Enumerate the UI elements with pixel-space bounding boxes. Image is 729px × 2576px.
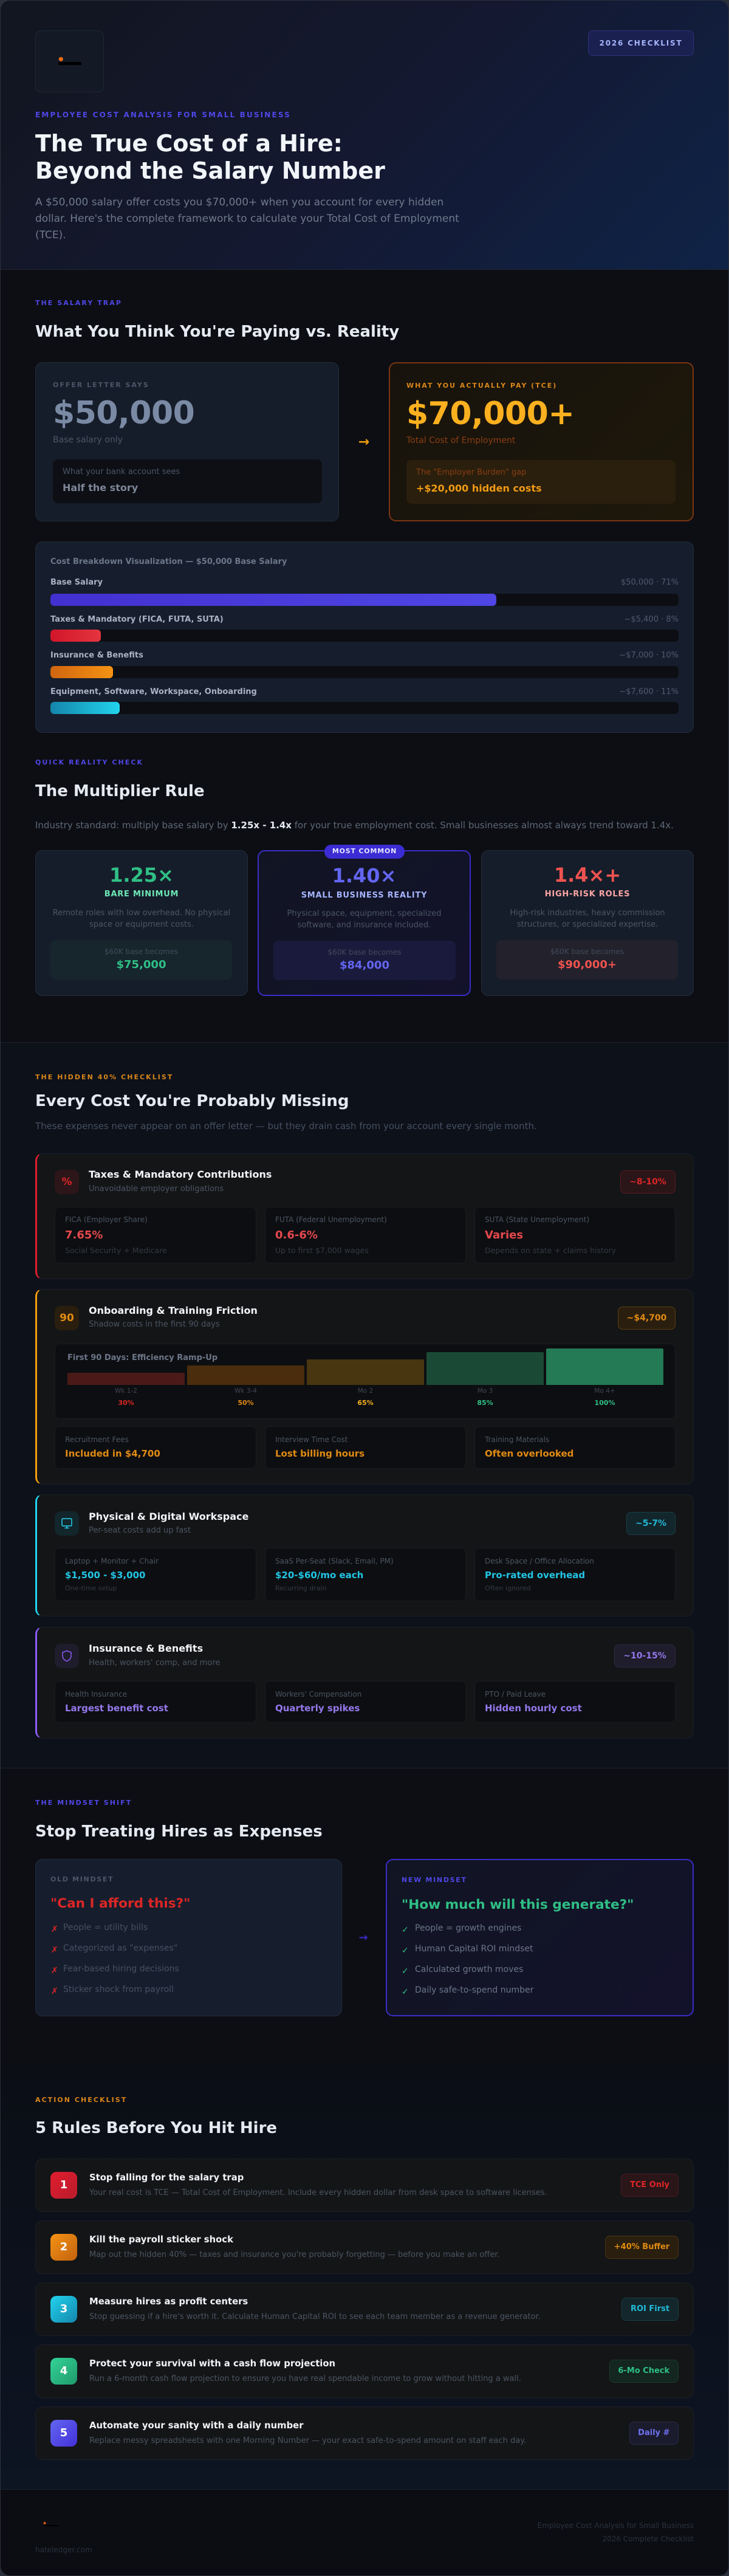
- label: Health Insurance: [65, 1690, 127, 1698]
- icon: shield: [55, 1644, 79, 1668]
- card title: Insurance & Benefits: [89, 1643, 203, 1654]
- value: Pro-rated overhead: [485, 1570, 585, 1581]
- item text: People = growth engines: [415, 1923, 521, 1933]
- description: [510, 908, 665, 929]
- value: $1,500 - $3,000: [65, 1570, 145, 1581]
- result value: $84,000: [340, 959, 389, 972]
- note: Up to first $7,000 wages: [275, 1246, 369, 1255]
- footer note: [538, 2521, 694, 2543]
- shield glyph: [62, 1650, 72, 1661]
- item: ✓: [402, 1925, 409, 1935]
- arrow: →: [358, 1931, 368, 1944]
- bar: month 4+: [546, 1348, 663, 1385]
- result label: $60K base becomes: [550, 947, 624, 956]
- label: NEW MINDSET: [402, 1876, 467, 1884]
- footer domain: hateledger.com: [35, 2546, 92, 2554]
- result value: $75,000: [117, 958, 166, 971]
- value: Lost billing hours: [275, 1448, 364, 1459]
- row label: Taxes & Mandatory (FICA, FUTA, SUTA): [50, 615, 224, 623]
- rule 4: [35, 2344, 694, 2398]
- section title: Stop Treating Hires as Expenses: [35, 1822, 323, 1841]
- item text: Fear-based hiring decisions: [63, 1964, 179, 1974]
- value: Included in $4,700: [65, 1448, 160, 1459]
- section: action checklist: [0, 2065, 729, 2490]
- box: SaaS: [265, 1548, 466, 1601]
- section tag: THE HIDDEN 40% CHECKLIST: [35, 1073, 173, 1081]
- box: health: [55, 1681, 256, 1723]
- card label: SMALL BUSINESS REALITY: [301, 891, 427, 900]
- value: 100%: [594, 1399, 615, 1407]
- box: recruitment: [55, 1426, 256, 1469]
- label: SUTA (State Unemployment): [485, 1215, 589, 1224]
- intro text: Industry standard: multiply base salary by 1.25x - 1.4x for your true employment cost. Small businesses almost always trend toward 1.4x.: [35, 820, 674, 831]
- section title: What You Think You're Paying vs. Reality: [35, 323, 399, 341]
- cost pill: ~10-15%: [623, 1651, 666, 1661]
- section: the salary trap: [0, 270, 729, 1043]
- item: ✓: [402, 1987, 409, 1997]
- bar: weeks 3-4: [187, 1365, 304, 1385]
- number: 4: [60, 2365, 67, 2377]
- rule 1: [35, 2159, 694, 2212]
- axis label: Mo 4+: [594, 1387, 615, 1395]
- card title: Taxes & Mandatory Contributions: [89, 1169, 272, 1180]
- number: [50, 2234, 77, 2261]
- axis label: Mo 2: [358, 1387, 373, 1395]
- tag pill: [621, 2298, 679, 2321]
- box: workers comp: [265, 1681, 466, 1723]
- multiplier: 1.25×: [109, 864, 174, 887]
- row value: ~$7,000 · 10%: [619, 650, 679, 660]
- number: [50, 2172, 77, 2199]
- badge: most common: [324, 845, 405, 859]
- card subtitle: Health, workers' comp, and more: [89, 1658, 220, 1668]
- row value: ~$5,400 · 8%: [625, 615, 679, 623]
- tag pill: [629, 2422, 679, 2445]
- item: ✓: [402, 1966, 409, 1976]
- value: Hidden hourly cost: [485, 1703, 582, 1714]
- label: OLD MINDSET: [50, 1875, 114, 1883]
- rule text: Stop guessing if a hire's worth it. Calculate Human Capital ROI to see each team member as a revenue generator.: [89, 2312, 541, 2321]
- cost pill: ~5-7%: [635, 1519, 666, 1528]
- cost pill: ~$4,700: [627, 1313, 666, 1323]
- item: ✗: [51, 1966, 58, 1976]
- value: Varies: [485, 1229, 523, 1242]
- box: SUTA: [474, 1207, 676, 1263]
- logo box: [35, 30, 104, 92]
- big number: $70,000+: [406, 396, 574, 432]
- result label: $60K base becomes: [327, 948, 402, 957]
- result box: [273, 941, 456, 980]
- rule title: Automate your sanity with a daily number: [89, 2420, 304, 2431]
- rule text: Your real cost is TCE — Total Cost of Employment. Include every hidden dollar from desk space to software licenses.: [89, 2188, 547, 2197]
- callout label: What your bank account sees: [63, 467, 180, 476]
- item text: Calculated growth moves: [415, 1965, 523, 1974]
- label: Workers' Compensation: [275, 1690, 361, 1698]
- bar: taxes: [50, 630, 679, 642]
- box: laptop: [55, 1548, 256, 1601]
- card: insurance: [35, 1627, 694, 1739]
- rule title: Measure hires as profit centers: [89, 2296, 248, 2307]
- note: Often ignored: [485, 1584, 531, 1592]
- description: software, and insurance included.: [298, 921, 431, 930]
- value: Often overlooked: [485, 1448, 573, 1459]
- card: 1.4x+: [481, 850, 694, 996]
- box: FICA: [55, 1207, 256, 1263]
- section subtitle: These expenses never appear on an offer letter — but they drain cash from your account every single month.: [35, 1121, 537, 1132]
- callout value: +$20,000 hidden costs: [416, 483, 542, 494]
- section tag: QUICK REALITY CHECK: [35, 758, 143, 766]
- cost pill: [618, 1307, 676, 1330]
- badge: 2026 checklist: 2026 CHECKLIST: [600, 39, 682, 47]
- card subtitle: Per-seat costs add up fast: [89, 1526, 191, 1535]
- value: Quarterly spikes: [275, 1703, 360, 1714]
- cost pill: [626, 1512, 676, 1535]
- bar: month 3: [426, 1352, 544, 1385]
- icon: percent: [55, 1170, 79, 1194]
- label: PTO / Paid Leave: [485, 1690, 546, 1698]
- value: 7.65%: [65, 1229, 103, 1242]
- tag pill: TCE Only: [630, 2180, 669, 2190]
- label: Desk Space / Office Allocation: [485, 1557, 594, 1565]
- row label: Base Salary: [50, 578, 103, 587]
- cost pill: [614, 1644, 676, 1668]
- panel: new mindset: [386, 1859, 694, 2016]
- tag pill: [605, 2236, 679, 2259]
- description: [287, 909, 442, 930]
- number: [50, 2420, 77, 2447]
- card subtitle: Shadow costs in the first 90 days: [89, 1320, 220, 1329]
- chart: efficiency ramp-up: [55, 1344, 676, 1419]
- value: 0.6-6%: [275, 1229, 318, 1242]
- note: Depends on state + claims history: [485, 1246, 616, 1255]
- value: 85%: [477, 1399, 493, 1407]
- quote: "Can I afford this?": [50, 1896, 190, 1911]
- chart title: First 90 Days: Efficiency Ramp-Up: [67, 1353, 217, 1362]
- item: ✓: [402, 1946, 409, 1956]
- rule title: Stop falling for the salary trap: [89, 2172, 244, 2183]
- card: workspace: [35, 1494, 694, 1616]
- logo mark: [58, 57, 81, 65]
- inner callout: [53, 459, 322, 503]
- number: 1: [60, 2179, 67, 2191]
- tag pill: +40% Buffer: [614, 2242, 669, 2251]
- box: PTO: [474, 1681, 676, 1723]
- rule 2: [35, 2221, 694, 2274]
- quote: "How much will this generate?": [402, 1897, 634, 1912]
- item: ✗: [51, 1925, 58, 1934]
- axis label: Wk 1-2: [115, 1387, 137, 1395]
- icon: 90: [55, 1306, 79, 1330]
- label: Recruitment Fees: [65, 1435, 129, 1444]
- tag pill: Daily #: [638, 2428, 669, 2437]
- bar: base salary: [50, 594, 679, 606]
- bar: insurance: [50, 666, 679, 678]
- box: desk: [474, 1548, 676, 1601]
- label: FUTA (Federal Unemployment): [275, 1215, 387, 1224]
- value: $20-$60/mo each: [275, 1570, 363, 1581]
- note: Social Security + Medicare: [65, 1246, 167, 1255]
- description: space or equipment costs.: [89, 920, 194, 929]
- item text: Sticker shock from payroll: [63, 1985, 174, 1994]
- icon: monitor: [55, 1511, 79, 1536]
- box: FUTA: [265, 1207, 466, 1263]
- caption: Base salary only: [53, 435, 123, 445]
- item text: Categorized as "expenses": [63, 1943, 177, 1953]
- title: [35, 130, 385, 184]
- result label: $60K base becomes: [104, 947, 178, 956]
- chart title: Cost Breakdown Visualization — $50,000 Base Salary: [50, 557, 287, 566]
- monitor glyph: [61, 1518, 72, 1529]
- row label: Equipment, Software, Workspace, Onboarding: [50, 687, 257, 696]
- card title: Physical & Digital Workspace: [89, 1511, 248, 1522]
- rule text: Run a 6-month cash flow projection to ensure you have real spendable income to grow without hitting a wall.: [89, 2374, 521, 2383]
- rule text: Map out the hidden 40% — taxes and insurance you're probably forgetting — before you make an offer.: [89, 2250, 500, 2259]
- footer logo: [44, 2522, 58, 2526]
- row label: Insurance & Benefits: [50, 650, 143, 660]
- description: Physical space, equipment, specialized: [287, 909, 442, 918]
- panel: true cost: [389, 362, 694, 521]
- label: OFFER LETTER SAYS: [53, 381, 149, 389]
- inner callout: [406, 460, 676, 504]
- section tag: THE MINDSET SHIFT: [35, 1799, 132, 1807]
- cost pill: ~8-10%: [629, 1177, 666, 1187]
- item: ✗: [51, 1987, 58, 1996]
- intro text: A $50,000 salary offer costs you $70,000+ when you account for every hidden: [35, 196, 443, 208]
- result box: [50, 940, 232, 980]
- rule 3: [35, 2282, 694, 2336]
- row value: $50,000 · 71%: [621, 578, 679, 587]
- number: [50, 2296, 77, 2323]
- footer: [0, 2490, 729, 2576]
- note: Recurring drain: [275, 1584, 327, 1592]
- card label: HIGH-RISK ROLES: [545, 890, 630, 899]
- section tag: ACTION CHECKLIST: [35, 2096, 127, 2104]
- intro text: [35, 196, 459, 241]
- section title: The Multiplier Rule: [35, 782, 205, 800]
- rule 5: [35, 2406, 694, 2460]
- card: onboarding: [35, 1289, 694, 1485]
- row value: ~$7,600 · 11%: [619, 687, 679, 696]
- value: 65%: [357, 1399, 374, 1407]
- axis label: Mo 3: [477, 1387, 493, 1395]
- value: Largest benefit cost: [65, 1703, 168, 1714]
- card: taxes: [35, 1153, 694, 1279]
- card: 1.25x: [35, 850, 248, 996]
- multiplier: 1.40×: [332, 864, 396, 887]
- item text: Daily safe-to-spend number: [415, 1985, 533, 1995]
- item text: People = utility bills: [63, 1923, 148, 1932]
- footer note: Employee Cost Analysis for Small Business: [538, 2521, 694, 2530]
- section tag: THE SALARY TRAP: [35, 299, 122, 307]
- number: 3: [60, 2303, 67, 2315]
- rule title: Protect your survival with a cash flow projection: [89, 2358, 335, 2369]
- header section: [0, 0, 729, 270]
- label: WHAT YOU ACTUALLY PAY (TCE): [406, 382, 557, 390]
- callout value: Half the story: [63, 482, 138, 493]
- number: 5: [60, 2427, 67, 2439]
- panel: cost breakdown chart: [35, 541, 694, 733]
- panel: old mindset: [35, 1859, 342, 2016]
- value: 50%: [238, 1399, 254, 1407]
- tag pill: [609, 2360, 679, 2383]
- number: 2: [60, 2241, 67, 2253]
- bar: equipment: [50, 702, 679, 714]
- description: [53, 908, 230, 929]
- number: [50, 2358, 77, 2385]
- intro text: dollar. Here's the complete framework to calculate your Total Cost of Employment: [35, 213, 459, 225]
- label: Training Materials: [485, 1435, 549, 1444]
- card title: Onboarding & Training Friction: [89, 1305, 258, 1316]
- box: training: [474, 1426, 676, 1469]
- axis label: Wk 3-4: [234, 1387, 257, 1395]
- tag pill: 6-Mo Check: [618, 2366, 669, 2375]
- cost pill: [620, 1170, 676, 1194]
- value: 30%: [118, 1399, 134, 1407]
- eyebrow: EMPLOYEE COST ANALYSIS FOR SMALL BUSINESS: [35, 111, 291, 119]
- description: Remote roles with low overhead. No physical: [53, 908, 230, 918]
- multiplier: 1.4×+: [554, 864, 621, 887]
- box: interview: [265, 1426, 466, 1469]
- icon: percent: %: [61, 1176, 72, 1188]
- note: One-time setup: [65, 1584, 117, 1592]
- label: SaaS Per-Seat (Slack, Email, PM): [275, 1557, 394, 1565]
- footer note: 2026 Complete Checklist: [602, 2535, 694, 2543]
- card: 1.40x: [258, 850, 471, 996]
- callout label: The "Employer Burden" gap: [416, 468, 526, 477]
- section: hidden costs checklist: [0, 1043, 729, 1768]
- description: structures, or specialized expertise.: [517, 920, 658, 929]
- title: Beyond the Salary Number: [35, 157, 385, 184]
- result box: [496, 940, 678, 980]
- tag pill: [621, 2174, 679, 2197]
- result value: $90,000+: [558, 958, 617, 971]
- item: ✗: [51, 1945, 58, 1955]
- panel: offer letter: [35, 362, 339, 521]
- section: the mindset shift: [0, 1768, 729, 2065]
- icon: 90: 90: [60, 1312, 74, 1324]
- rule text: Replace messy spreadsheets with one Morning Number — your exact safe-to-spend amount on staff each day.: [89, 2436, 526, 2445]
- arrow: →: [358, 434, 369, 450]
- label: Interview Time Cost: [275, 1435, 347, 1444]
- badge: most common: MOST COMMON: [332, 847, 397, 855]
- bar: month 2: [307, 1359, 424, 1385]
- bar: weeks 1-2: [67, 1373, 185, 1385]
- item text: Human Capital ROI mindset: [415, 1944, 533, 1954]
- section title: 5 Rules Before You Hit Hire: [35, 2119, 277, 2137]
- badge: 2026 checklist: [588, 30, 694, 56]
- label: Laptop + Monitor + Chair: [65, 1557, 159, 1565]
- card label: BARE MINIMUM: [104, 890, 179, 899]
- caption: Total Cost of Employment: [406, 436, 515, 445]
- intro text: (TCE).: [35, 228, 66, 241]
- label: FICA (Employer Share): [65, 1215, 148, 1224]
- big number: $50,000: [53, 395, 194, 431]
- card subtitle: Unavoidable employer obligations: [89, 1184, 224, 1194]
- title: The True Cost of a Hire:: [35, 130, 343, 157]
- rule title: Kill the payroll sticker shock: [89, 2234, 233, 2245]
- tag pill: ROI First: [631, 2304, 669, 2313]
- section title: Every Cost You're Probably Missing: [35, 1092, 349, 1110]
- description: High-risk industries, heavy commission: [510, 908, 665, 918]
